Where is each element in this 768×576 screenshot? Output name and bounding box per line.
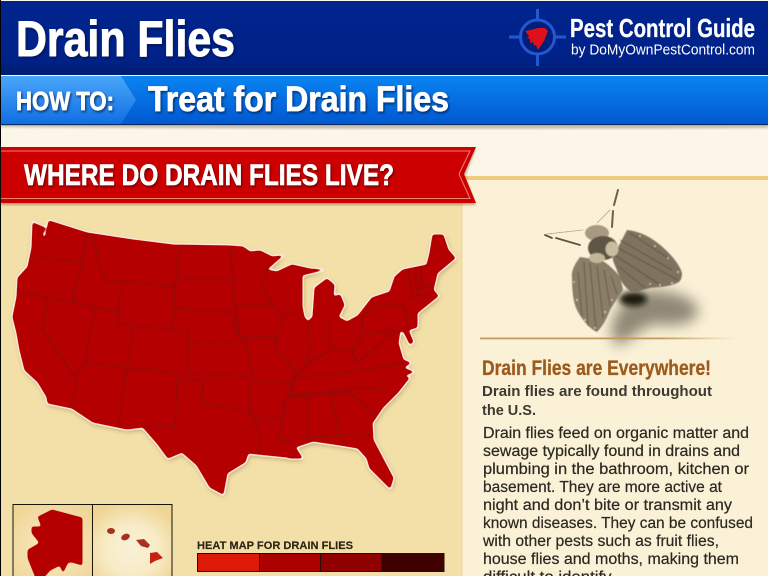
gold divider band bbox=[465, 176, 768, 180]
legend: heat map bbox=[197, 540, 444, 572]
inset: Alaska bbox=[13, 504, 92, 576]
fly shadow bbox=[611, 291, 698, 346]
legend colour scale bbox=[198, 554, 444, 572]
icon: crosshair logo with fly bbox=[509, 9, 566, 66]
subtitle: Treat for Drain Flies bbox=[148, 80, 449, 119]
section summary: the U.S. bbox=[482, 402, 536, 419]
fly body bbox=[585, 225, 618, 263]
section body: basement. They are more active at bbox=[483, 479, 723, 496]
fly left wing bbox=[572, 257, 623, 332]
how-to tab bbox=[1, 76, 136, 124]
section body: with other pests such as fruit flies, bbox=[482, 533, 719, 550]
inset: Hawaii bbox=[92, 504, 172, 576]
logo text bbox=[570, 13, 755, 58]
fly wing veins bbox=[578, 233, 678, 330]
banner: where do drain flies live bbox=[1, 147, 476, 205]
subheader shadow bbox=[1, 125, 768, 129]
fly right wing bbox=[613, 230, 682, 293]
section summary bbox=[482, 383, 712, 419]
chart: US map bbox=[13, 221, 456, 496]
section body: Drain flies feed on organic matter and bbox=[483, 425, 749, 442]
divider under fly bbox=[480, 338, 736, 339]
section body bbox=[482, 425, 753, 576]
text block: drain flies are everywhere bbox=[482, 357, 753, 576]
section body: sewage typically found in drains and bbox=[483, 443, 740, 460]
section heading: Drain Flies are Everywhere! bbox=[482, 357, 711, 380]
title: Drain Flies bbox=[16, 11, 235, 67]
legend title: HEAT MAP FOR DRAIN FLIES bbox=[197, 540, 353, 552]
image: drain fly bbox=[545, 190, 698, 346]
section body: house flies and moths, making them bbox=[483, 551, 739, 568]
header: dark blue title bar bbox=[1, 1, 768, 75]
subheader: blue how-to bar bbox=[0, 76, 768, 125]
fly wing spots bbox=[573, 235, 679, 329]
section body: plumbing in the bathroom, kitchen or bbox=[483, 461, 749, 478]
fly antennae bbox=[545, 190, 618, 245]
section body: night and don’t bite or transmit any bbox=[483, 497, 732, 514]
section summary: Drain flies are found throughout bbox=[482, 383, 712, 400]
panel edge bbox=[461, 180, 462, 576]
panel: map background bbox=[1, 180, 461, 576]
section body: known diseases. They can be confused bbox=[483, 515, 753, 532]
logo text: by DoMyOwnPestControl.com bbox=[571, 42, 755, 58]
inset: Alaska and Hawaii bbox=[13, 504, 172, 576]
panel: right description background bbox=[462, 180, 768, 576]
banner heading: WHERE DO DRAIN FLIES LIVE? bbox=[24, 159, 394, 192]
how-to label: HOW TO: bbox=[16, 86, 114, 116]
